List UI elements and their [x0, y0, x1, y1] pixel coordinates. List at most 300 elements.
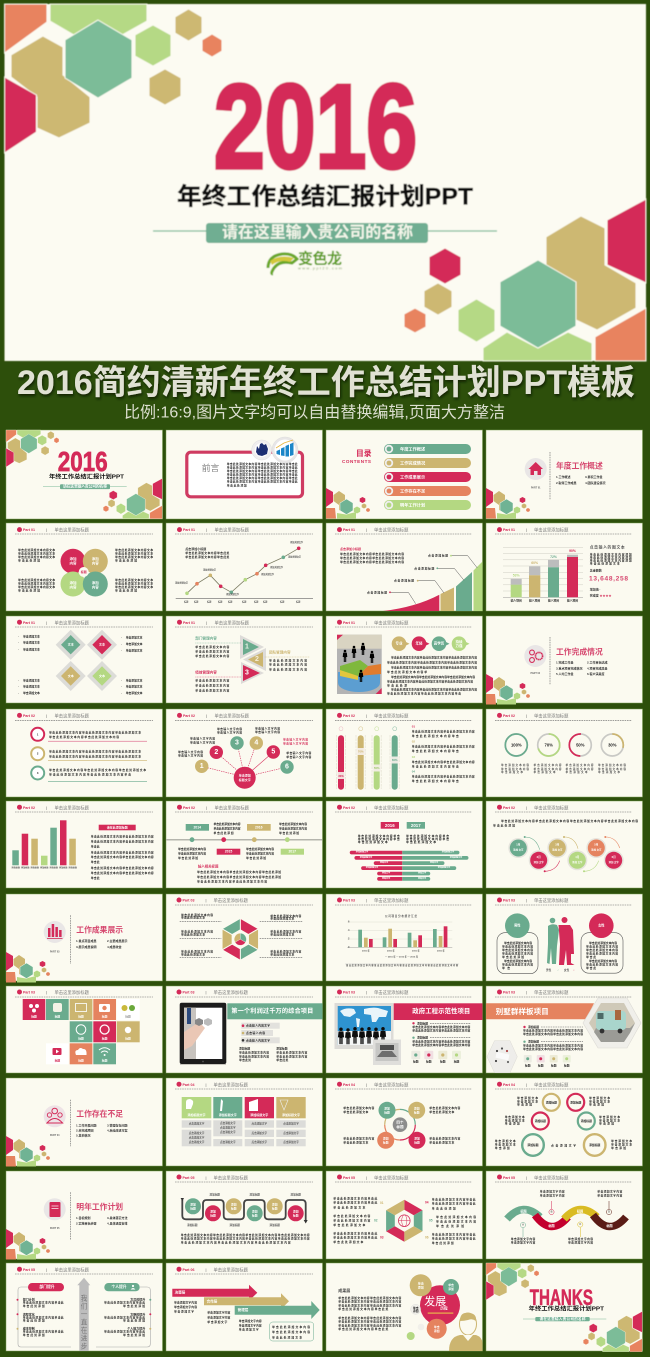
text blocks: 单击添加: [611, 1146, 626, 1150]
summary: [197, 863, 281, 884]
milestone texts: 单击此处添加文本内容: [279, 826, 307, 830]
slide 24: silhouettes: [486, 894, 642, 981]
text blocks: 单击此处添加文本内容文本: [18, 578, 55, 582]
section list: 1.工作开展问题: [76, 1122, 97, 1127]
right labels: 单击此处添加文本内容: [270, 950, 301, 954]
header: |: [46, 806, 47, 810]
header: 单击这里添加标题: [54, 1266, 90, 1274]
text blocks: 单击此处添加: [18, 558, 40, 562]
grouped bars: 2015 年: [412, 948, 420, 952]
paragraph: 单击此处添加文本内容单击此处添加文本内容单击此: [227, 462, 298, 466]
ring captions: 添加标题: [589, 1143, 600, 1147]
ring captions: 添加标题: [535, 1119, 546, 1123]
header: |: [526, 990, 527, 994]
header: [15, 712, 153, 720]
gauges: 70%: [358, 750, 364, 754]
header: 单击这里添加标题: [534, 1082, 569, 1088]
personal pill: 个人提升: [111, 1284, 127, 1289]
process nodes: 添加 文字: [534, 860, 544, 864]
text blocks: 单击添加: [505, 1122, 520, 1126]
block: tan: 单击此处添加文本内容: [269, 658, 307, 662]
arrow up: 在: [81, 1326, 88, 1334]
node labels: 添加标题: [291, 1192, 301, 1196]
details: 添加标题: [239, 1046, 250, 1050]
bullet lists: 单击添加文本: [126, 642, 143, 646]
bullet lists: 单击添加文本: [23, 685, 40, 689]
header: |: [366, 714, 367, 718]
bullet bars: 点击输入内容: [246, 1031, 265, 1035]
node labels: 单击输入文字内容: [217, 727, 242, 731]
legend: ♀: [573, 969, 575, 972]
roadmap nodes: 标题: [190, 1206, 196, 1210]
right labels: 单击此处添加文本: [270, 952, 294, 956]
header: 单击这里添加标题: [54, 619, 90, 626]
year tags: 2015: [225, 850, 232, 854]
header: |: [366, 1083, 367, 1087]
section title: 工作存在不足: [76, 1108, 123, 1118]
header: [175, 989, 313, 997]
header: [335, 804, 472, 812]
cell text: 点击添加文字: [189, 1140, 205, 1144]
node labels: [187, 1192, 301, 1227]
petals: 添加: [70, 580, 77, 585]
section list: 2.取得工作成果: [556, 480, 577, 485]
header: |: [206, 621, 207, 625]
pin B: 单击添加文字内容: [540, 1190, 565, 1194]
header: Part 02: [503, 714, 515, 718]
header: 单击这里添加标题: [534, 526, 569, 534]
right text: 单击此处添加文本内容单击此: [432, 1237, 476, 1241]
stats panel: 13,648,258: [589, 576, 628, 582]
company pill: 请在这里输入贵公司的名称: [63, 484, 107, 489]
hexagon photo: van: [583, 998, 641, 1048]
pin C: [568, 1222, 593, 1245]
roadmap nodes: 添加: [252, 1210, 258, 1214]
right panel: 单击此: [586, 955, 596, 959]
header: [175, 526, 313, 534]
left panel: 单击: [502, 966, 510, 970]
details: 添加标题: [528, 1025, 539, 1029]
department pill: 部门提升: [39, 1284, 55, 1289]
milestone texts: 单击此处添加: [214, 831, 234, 835]
footnote: 单击此处添加文本内容单击此处添加文本内容单击此处添加文本内容单击此处添加文本内容: [346, 963, 459, 967]
header: 单击这里添加标题: [214, 989, 249, 996]
numbered nodes: 3: [235, 740, 239, 746]
company pill: 请在这里输入贵公司的名称: [540, 1316, 586, 1321]
bullet lists: 单击添加文本: [23, 678, 40, 682]
header: Part 03: [23, 990, 35, 994]
bullet lists: 单击添加文本: [126, 678, 143, 682]
block: teal: 单击此处添加文本内容: [195, 649, 229, 653]
arrow up: 我: [81, 1294, 88, 1302]
process nodes: 1月: [516, 842, 521, 846]
arrow notes: 单击添加文字内容: [207, 1315, 230, 1319]
ring captions: 单击添加文本内容: [501, 767, 529, 771]
header: 单击这里添加标题: [374, 897, 409, 904]
slide 35: pinwheel hexagon: [326, 1171, 482, 1259]
block: tan: [265, 650, 310, 671]
right panel: 单击此处添加文本内容: [586, 962, 618, 966]
roadmap nodes: 添加: [231, 1202, 237, 1206]
slide 37: progress arrow: [6, 1263, 162, 1351]
header: [15, 1266, 153, 1274]
left text: 单击此处添加文本内容单击此: [333, 1196, 377, 1200]
text blocks: 单击此处添加文本内容文本: [18, 582, 55, 586]
headline banner: 政府工程示范性项目: [412, 1006, 470, 1015]
butterfly bars: 添加文字: [380, 860, 388, 864]
left text: 单击此处添加文本: [333, 1223, 365, 1227]
tile row 3: 标题: [55, 1058, 60, 1062]
section list: 3.管理存在问题: [107, 1122, 128, 1127]
roadmap nodes: 标题: [252, 1214, 258, 1218]
callouts: [390, 556, 477, 604]
slide 27: photo with red banner: [326, 986, 482, 1073]
wave band: [507, 1209, 626, 1227]
paragraph: 单击此处添加: [227, 484, 247, 488]
node labels: 单击输入文字内容: [190, 737, 215, 741]
header: Part 02: [343, 806, 355, 810]
paragraph: [387, 656, 477, 696]
slide 15: thermometers: [326, 709, 482, 797]
silhouettes: [547, 917, 574, 965]
details: [412, 1021, 471, 1047]
part label: PART 03: [50, 950, 60, 954]
bubbles: 年轻: [416, 641, 423, 646]
header: 单击这里添加标题: [534, 804, 569, 811]
company name banner: [153, 222, 497, 243]
pin D: 单击添加文字内容: [597, 1190, 622, 1194]
rings: [522, 1094, 606, 1156]
bullet lists: ·: [18, 634, 19, 638]
divider: [549, 452, 551, 500]
left text: [333, 1196, 377, 1244]
columns: 添加标题: [59, 866, 68, 870]
hero slide: [4, 4, 646, 361]
small icons: 标题: [525, 1064, 531, 1068]
icon: bars: [44, 921, 66, 943]
section list: [76, 938, 128, 949]
cell text: 点击添加文字: [189, 1122, 205, 1126]
main banner title: 2016简约清新年终工作总结计划PPT模板: [17, 364, 635, 402]
divider: [549, 637, 551, 685]
header: |: [526, 1176, 527, 1180]
item 2: 单击此处添加文本内容单击此处添加文本内容单击此处添加文本: [49, 754, 141, 758]
slide 14: radial diagram: [166, 709, 322, 797]
year notes: 单击此处添加文本内容单击: [406, 834, 449, 838]
bullet lists: ·: [18, 678, 19, 682]
rings: [505, 734, 623, 756]
small icons: 标题: [454, 1060, 459, 1064]
right list: 单击此处添加文本内容单击此: [104, 1301, 145, 1305]
line chart: 标题: [228, 599, 233, 603]
left panel: 单击此处添加文本内容: [502, 962, 533, 966]
axis: [166, 837, 322, 842]
left list: 部门计划: [23, 1297, 35, 1302]
bullet lists: 单击添加文本: [23, 647, 40, 651]
header: |: [366, 621, 367, 625]
pin A: [511, 1222, 535, 1245]
line chart: 标题: [218, 599, 223, 603]
pinwheel: [386, 1200, 422, 1242]
tile row 1: 标题: [55, 1014, 60, 1018]
ring captions: 单击添加文本内容: [534, 767, 562, 771]
bars: 60%: [531, 561, 538, 565]
menu item 3: [384, 472, 471, 482]
arrow notes: 单击添加文字: [207, 1320, 227, 1324]
cell text: 点击添加文字: [283, 1131, 299, 1135]
icon: house: [525, 458, 547, 480]
details: 单击此处添加文本内容单击此处添加文本内容: [523, 1029, 583, 1033]
line chart: 标题: [194, 599, 199, 603]
block: tan: 单击此处添加文本内容: [269, 667, 307, 671]
slide 40: thanks: [486, 1263, 642, 1352]
year tags: 2016: [255, 825, 263, 829]
details: 添加标题: [417, 1036, 428, 1040]
header: |: [526, 806, 527, 810]
column headers: 添加标题文字: [187, 1112, 206, 1117]
year notes: 单击此处添加文本: [358, 840, 388, 844]
left panel: 男性: [514, 923, 521, 928]
paragraph: 单击此处添: [387, 684, 407, 688]
diamonds: 文本: [99, 642, 105, 647]
description: 单击此处添加文本内容单击此处添加文本内容: [91, 835, 154, 839]
icon: hands circle: [252, 440, 272, 460]
headline banner: [486, 1003, 594, 1019]
heading and text: 单击此处添加文本内容单击此处添加文本内容: [338, 1320, 401, 1324]
year tags: 2017: [289, 850, 296, 854]
process nodes: 添加 文字: [609, 860, 619, 864]
header: 单击这里添加标题: [374, 1082, 409, 1088]
slide 5: four petals: [6, 523, 162, 611]
bubbles: 添加: [413, 1309, 419, 1313]
stats panel: 单击此处添加文本: [590, 562, 620, 566]
header: Part 03: [343, 990, 355, 994]
item 1: 1: [37, 732, 39, 736]
small icons: 标题: [538, 1064, 544, 1068]
item 1: [31, 728, 147, 741]
illustration: person: [449, 1313, 482, 1351]
process nodes: 4月: [575, 855, 580, 859]
right text: 单击此处添加: [432, 1241, 454, 1245]
gauges: [336, 727, 399, 790]
left numbers: 03: [380, 1236, 384, 1240]
bullet lists: ·: [121, 649, 122, 653]
tile row 1: 标题: [78, 1014, 84, 1018]
column headers: [182, 1097, 306, 1118]
left panel: 单击此处添加文本内容: [502, 948, 533, 952]
company name banner: 请在这里输入贵公司的名称: [222, 222, 413, 242]
line chart: 标题: [296, 599, 301, 603]
paragraph: 单击此处添加文本内容单击此处添加文本内容单击此处添加文本内容: [391, 675, 475, 679]
section list: 4.项目完成质量: [587, 666, 608, 671]
header: [175, 804, 313, 812]
header: 单击这里添加标题: [54, 526, 90, 534]
text blocks: 单击添加文本: [495, 1139, 516, 1143]
header: Part 01: [183, 621, 195, 625]
gauge text: [412, 724, 475, 783]
legend: [546, 968, 575, 972]
arrow up: 步: [81, 1342, 88, 1350]
intro text: 点击添加小标题: [340, 546, 361, 551]
menu item 4: 工作存在不足: [400, 488, 426, 494]
arrow: tan: [204, 1293, 289, 1309]
arrow up: 直: [81, 1318, 88, 1326]
diamonds: 文本: [99, 673, 105, 678]
header: [175, 1174, 313, 1182]
slide 29: section 4: [6, 1078, 162, 1166]
bullet lists: 单击添加文本: [126, 691, 143, 695]
paragraph: 单击此处添加文本内容单击此处添加文本内容单击此处添加文本内容: [387, 680, 473, 684]
node labels: 单击输入文字内容: [283, 741, 308, 745]
side text: 单击此处添加文本内容: [343, 1106, 374, 1110]
right text: 单击此处添加文本内容: [436, 1215, 476, 1219]
logo: chameleon: [268, 250, 343, 274]
tile row 3: [46, 1043, 116, 1064]
butterfly bars: 添加文字: [418, 870, 426, 874]
arrow notes: 单击添加文字内容: [174, 1305, 197, 1309]
line chart: 标题: [184, 599, 189, 603]
line chart: 标题: [242, 599, 247, 603]
connectors: [202, 743, 287, 777]
gauge text: 02: [412, 740, 415, 744]
diamonds: 文本: [68, 642, 74, 647]
node labels: 添加标题: [250, 1192, 260, 1196]
snake path: [181, 1198, 308, 1224]
ring captions: 单击添加文本内容: [566, 763, 594, 767]
grouped bars: 2: [348, 936, 350, 940]
right numbers: 04: [425, 1201, 429, 1205]
cell text: 点击添加文字: [252, 1140, 267, 1144]
tablet: [180, 1003, 226, 1065]
headline banner: [394, 1003, 482, 1020]
summary: 单击此处添加文本内容单击此处添加文本内容: [197, 880, 267, 884]
header: [15, 989, 153, 997]
gauge text: 单击此处添加文本内容单击此处添加文本内容: [412, 760, 475, 764]
satellite circles: 添加: [384, 1106, 390, 1110]
left labels: [180, 913, 221, 958]
bars: [503, 547, 583, 603]
slide 11: photo and bubbles: [326, 616, 482, 703]
satellite circles: 标题: [414, 1110, 420, 1114]
right list: [104, 1297, 151, 1337]
header: Part 01: [503, 528, 515, 532]
slide 2: preface: [166, 430, 322, 519]
section list: 2.未完成原因: [76, 1128, 94, 1133]
petals: 内容: [70, 560, 77, 566]
node labels: 单击输入文字内容: [190, 741, 215, 745]
legend: 男性: [546, 968, 552, 972]
paragraph: [181, 1233, 310, 1244]
hexagons: [6, 952, 50, 982]
header: [175, 619, 313, 627]
left text: 单击此处添加文本内容: [333, 1214, 370, 1218]
description: 单击此处添加文本内容单击此处添加文本内容: [91, 839, 154, 843]
heading and text: [338, 1287, 401, 1331]
ring values: [511, 742, 617, 748]
ring captions: 单击添加文本: [566, 770, 588, 774]
left list: 单击此处添加: [23, 1333, 45, 1337]
details: 单击此处: [239, 1058, 251, 1062]
columns: 添加标题: [12, 866, 21, 870]
text blocks: 单击此处添加文本内容文本: [115, 585, 153, 589]
grouped bars: 2015 年: [362, 948, 370, 952]
gauge text: 单击此处添加文本内容单击: [412, 779, 459, 783]
pin C: 单击添加文字内容: [568, 1241, 593, 1245]
table cells: [182, 1120, 306, 1146]
right list: 单击此处添加: [123, 1319, 145, 1323]
node labels: 单击输入文字内容: [286, 751, 311, 755]
year notes: 单击此处添加文本内容单击: [406, 837, 449, 841]
ring captions: 单击添加文本: [534, 770, 556, 774]
ring captions: 单击添加文本内容: [534, 763, 562, 767]
note box: [270, 1322, 314, 1341]
ring captions: 单击添加文本: [598, 770, 620, 774]
ring captions: [527, 1100, 600, 1147]
part label: PART 04: [50, 1134, 60, 1137]
bullet lists: ·: [18, 691, 19, 695]
hexagons: [6, 1229, 50, 1260]
bubbles: 添加: [418, 1284, 424, 1290]
callout labels: 点击添加标题: [414, 566, 434, 570]
bars: 输入项目: [548, 599, 559, 603]
slide 33: section 5: [6, 1171, 162, 1260]
photo: world map team: [334, 1003, 401, 1065]
header: |: [46, 990, 47, 994]
bubble headline: [424, 1294, 453, 1314]
description: 单击此处添加文本内容单击此处添加文本内容: [91, 866, 154, 870]
note box: 单击此处添加文本: [272, 1335, 302, 1339]
details: 单击此处添加文本内容单击此处添加文本内容: [523, 1047, 583, 1051]
section list: 1.重点项目成果: [76, 938, 97, 943]
right panel: 单击此: [586, 966, 596, 970]
label tag: [99, 824, 136, 830]
tile row 2: 标题: [102, 1037, 108, 1041]
slide 20: process circles: [486, 801, 642, 888]
roadmap nodes: [185, 1198, 304, 1221]
bubbles: [407, 1274, 460, 1340]
arrow notes: 单击添加文字内容: [207, 1310, 230, 1314]
section list: [556, 660, 608, 676]
header: Part 03: [182, 898, 194, 902]
hexagon cluster: bottom right: [404, 199, 646, 361]
side text: 单击此处添加文本: [343, 1141, 368, 1145]
header: [335, 712, 472, 720]
text blocks: 单击此处添加: [18, 588, 40, 592]
column headers: 添加标题文字: [219, 1112, 237, 1117]
node labels: 添加标题: [270, 1223, 280, 1227]
header: [175, 712, 313, 720]
header: Part 04: [182, 1083, 194, 1087]
line chart: 添加关键文字: [290, 540, 304, 544]
header: 单击这里添加标题: [214, 619, 250, 626]
left text: 单击此处添加文本内容单击此: [333, 1201, 377, 1205]
line chart: 添加关键文字: [175, 580, 189, 584]
bullet lists: ·: [121, 636, 122, 640]
roadmap nodes: 添加: [210, 1210, 216, 1214]
header: Part 05: [503, 1176, 515, 1180]
ring values: 70%: [545, 742, 553, 748]
ring captions: 添加标题: [546, 1100, 557, 1104]
header: [335, 1174, 472, 1182]
section list: 4.后续改进方案: [107, 1128, 128, 1133]
right panel: 女性: [598, 923, 605, 928]
right text: 单击此处添加: [436, 1224, 464, 1228]
text blocks: 单击添加: [495, 1146, 510, 1150]
bars: 输入项目: [511, 599, 522, 603]
text blocks: 单击添加文本: [589, 1099, 610, 1103]
pin A: 单击添加文字内容: [511, 1237, 535, 1241]
center hub: 标题: [396, 1124, 404, 1129]
